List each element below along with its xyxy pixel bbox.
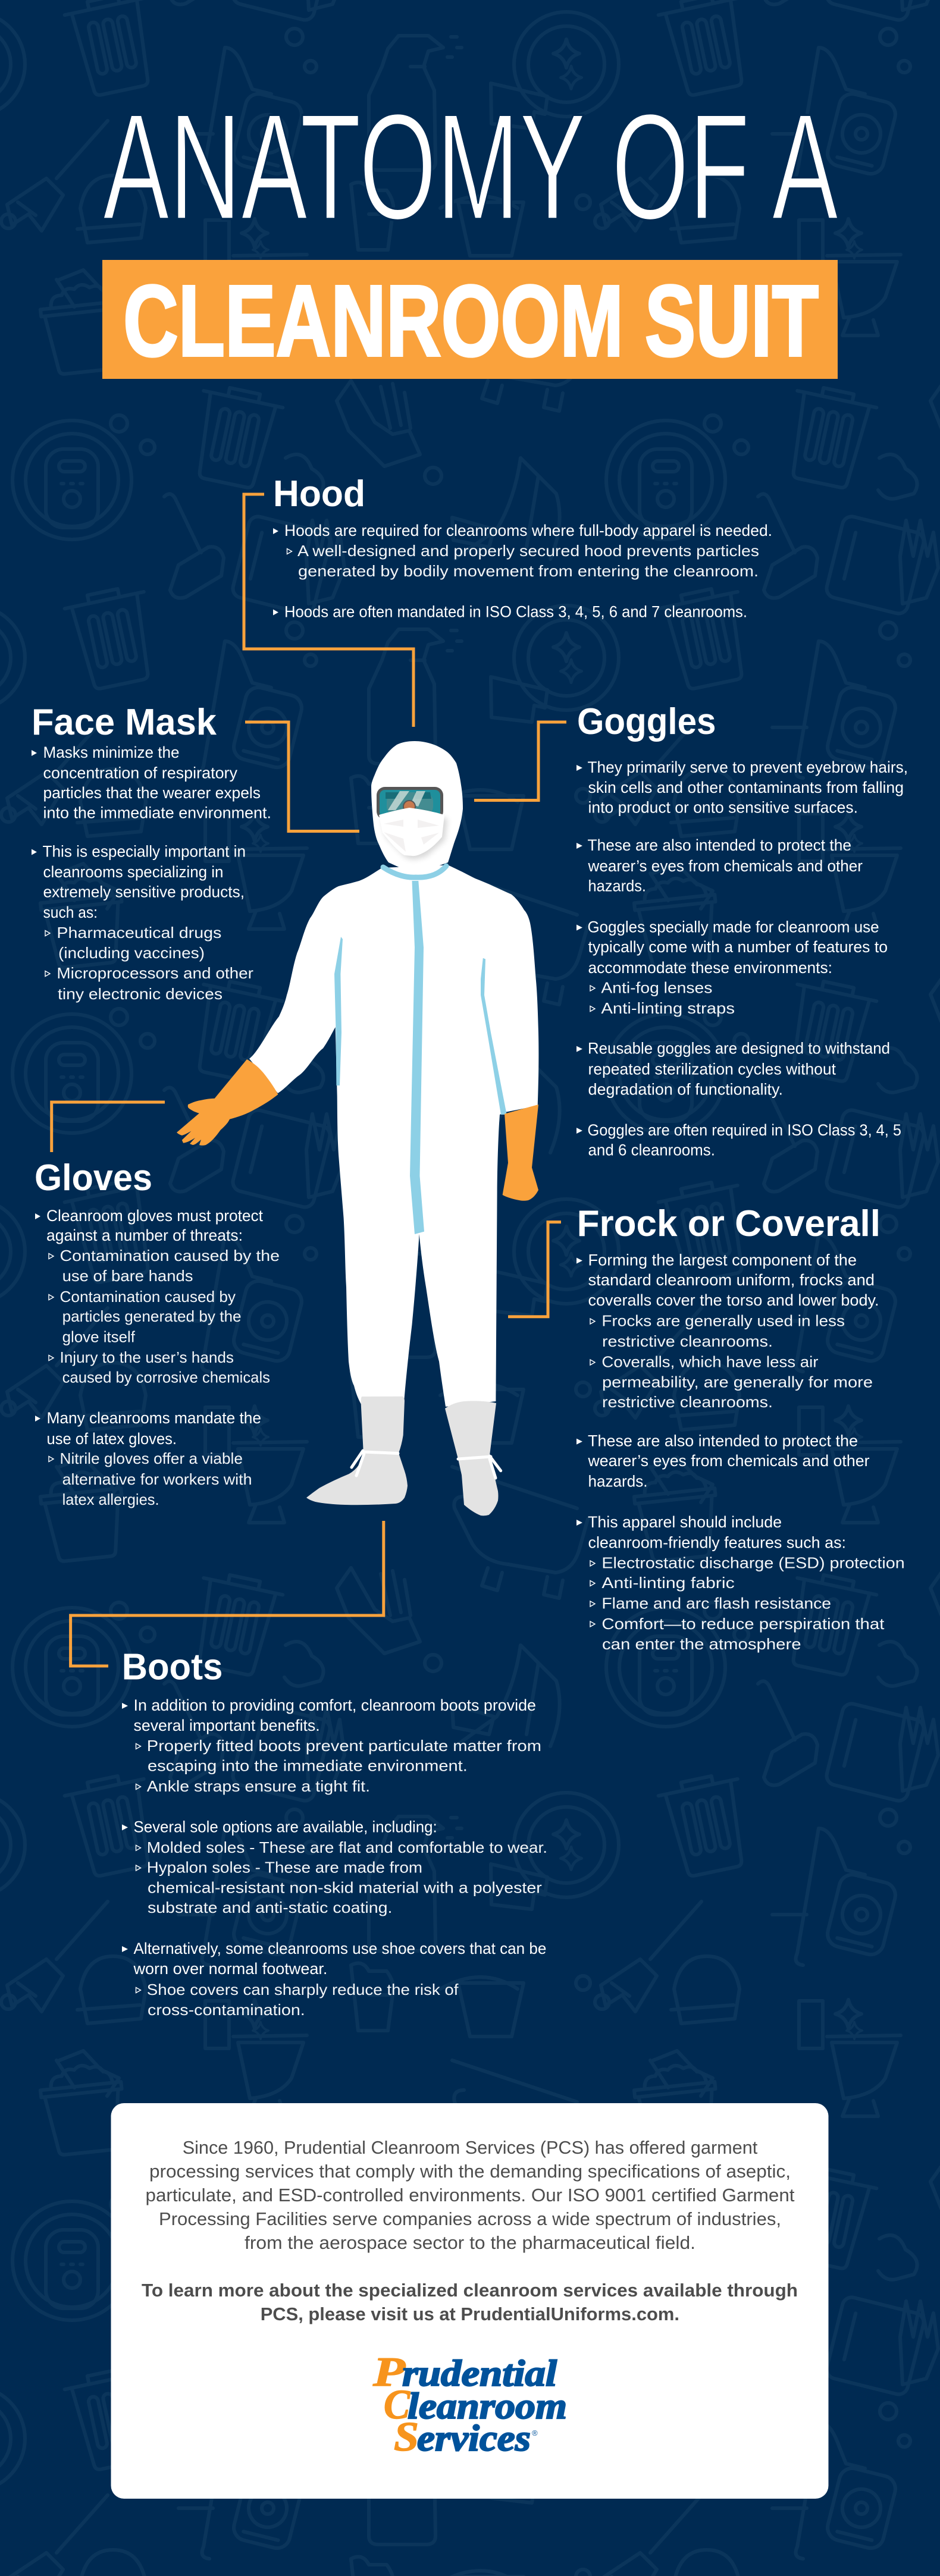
text block: gloves: latex allergies.	[62, 1491, 159, 1508]
text block: face mask: Microprocessors and other	[57, 964, 253, 982]
text block: frock or coverall: wearer’s eyes from chemicals and other	[587, 1452, 870, 1470]
text block: frock or coverall: Flame and arc flash resistance	[601, 1595, 831, 1612]
text block: frock or coverall: coveralls cover the torso and lower body.	[588, 1291, 879, 1309]
text block: boots: Ankle straps ensure a tight fit.	[147, 1777, 370, 1795]
text block: about: Since 1960, Prudential Cleanroom Services (PCS) has offered garment	[183, 2137, 758, 2158]
text block: gloves	[35, 1207, 280, 1508]
text block: goggles: They primarily serve to prevent eyebrow hairs,	[588, 758, 908, 776]
glove: left	[177, 1059, 278, 1146]
logo: Prudential Cleanroom Services	[372, 2349, 567, 2460]
call to action: PCS, please visit us at PrudentialUniforms.com.	[261, 2304, 679, 2324]
panel: goggles	[474, 701, 908, 1159]
logo: Prudential Cleanroom Services: ervices	[417, 2418, 531, 2459]
text block: goggles: typically come with a number of features to	[588, 938, 888, 956]
text block: frock or coverall: restrictive cleanrooms.	[602, 1332, 773, 1350]
text block: goggles: wearer’s eyes from chemicals and other	[588, 857, 863, 875]
text block: boots: Alternatively, some cleanrooms use shoe covers that can be	[133, 1940, 546, 1957]
text block: boots: Molded soles - These are flat and comfortable to wear.	[147, 1838, 547, 1856]
heading: gloves: Gloves	[35, 1157, 152, 1198]
text block: frock or coverall: restrictive cleanrooms.	[602, 1393, 773, 1411]
text block: frock or coverall: This apparel should include	[588, 1513, 782, 1531]
suit stripes	[334, 881, 507, 1234]
text block: hood: Hoods are often mandated in ISO Class 3, 4, 5, 6 and 7 cleanrooms.	[284, 603, 747, 621]
text block: frock or coverall: Forming the largest component of the	[588, 1251, 857, 1269]
text block: frock or coverall: Comfort—to reduce perspiration that	[601, 1615, 885, 1633]
text block: about: particulate, and ESD-controlled environments. Our ISO 9001 certified Garment	[145, 2185, 795, 2205]
text block: frock or coverall: can enter the atmosphere	[602, 1635, 801, 1653]
text block: gloves: alternative for workers with	[62, 1470, 252, 1488]
figure: person in cleanroom suit	[177, 741, 538, 1516]
text block: frock or coverall	[576, 1251, 905, 1653]
text block: gloves: Nitrile gloves offer a viable	[59, 1449, 243, 1467]
face mask	[379, 808, 447, 859]
suit body	[249, 865, 538, 1407]
text block: gloves: glove itself	[62, 1328, 136, 1345]
text block: face mask: concentration of respiratory	[43, 764, 238, 782]
text block: frock or coverall: hazards.	[588, 1473, 647, 1491]
logo: Prudential Cleanroom Services: C	[384, 2382, 411, 2428]
connector: face mask	[245, 722, 359, 832]
text block: gloves: particles generated by the	[62, 1307, 242, 1325]
text block: frock or coverall: These are also intended to protect the	[588, 1432, 858, 1450]
hood	[371, 741, 463, 874]
text block: boots: cross-contamination.	[148, 2001, 305, 2019]
heading: face mask: Face Mask	[32, 702, 217, 743]
text block: goggles: and 6 cleanrooms.	[588, 1141, 715, 1159]
text block: boots: Properly fitted boots prevent particulate matter from	[147, 1737, 541, 1755]
text block: goggles: Goggles specially made for cleanroom use	[588, 918, 879, 936]
text block: face mask: (including vaccines)	[58, 944, 205, 962]
text block: boots: chemical-resistant non-skid material with a polyester	[148, 1878, 542, 1896]
text block: boots: worn over normal footwear.	[133, 1960, 327, 1978]
logo: Prudential Cleanroom Services: P	[372, 2349, 406, 2395]
connector: gloves	[52, 1102, 165, 1152]
text block: hood: generated by bodily movement from entering the cleanroom.	[298, 562, 759, 580]
text block: goggles: hazards.	[588, 877, 646, 895]
text block: goggles: Anti-fog lenses	[601, 979, 712, 997]
text block: boots: substrate and anti-static coating.	[148, 1899, 393, 1916]
text block: gloves: Cleanroom gloves must protect	[46, 1207, 264, 1225]
text block: about	[145, 2137, 795, 2253]
text block: about: from the aerospace sector to the pharmaceutical field.	[245, 2232, 695, 2253]
heading: frock or coverall: Frock or Coverall	[577, 1203, 881, 1244]
connector: frock	[508, 1222, 561, 1317]
text block: boots: In addition to providing comfort, cleanroom boots provide	[133, 1696, 536, 1714]
text block: frock or coverall: permeability, are generally for more	[602, 1373, 873, 1391]
text block: goggles: Goggles are often required in ISO Class 3, 4, 5	[588, 1121, 901, 1139]
text block: boots	[122, 1696, 547, 2019]
goggles	[377, 787, 443, 820]
text block: hood: Hoods are required for cleanrooms where full-body apparel is needed.	[284, 522, 772, 539]
text block: gloves: use of bare hands	[62, 1267, 193, 1285]
text block: hood	[273, 522, 772, 621]
connector: hood	[244, 494, 413, 727]
text block: boots: Hypalon soles - These are made from	[147, 1859, 422, 1877]
text block: frock or coverall: Coveralls, which have less air	[601, 1353, 819, 1370]
panel: hood	[244, 473, 772, 727]
connector: goggles	[474, 722, 566, 801]
text block: goggles: These are also intended to protect the	[588, 836, 851, 854]
text block: frock or coverall: standard cleanroom uniform, frocks and	[588, 1271, 875, 1289]
text block: hood: A well-designed and properly secured hood prevents particles	[297, 542, 759, 560]
text block: frock or coverall: Anti-linting fabric	[601, 1574, 735, 1592]
logo: Prudential Cleanroom Services: ®	[532, 2428, 538, 2437]
title	[102, 82, 838, 379]
text block: face mask: tiny electronic devices	[58, 985, 223, 1003]
panel: frock or coverall	[508, 1203, 905, 1653]
text block: face mask: particles that the wearer expels	[43, 784, 261, 802]
glove: right	[503, 1105, 538, 1201]
text block: frock or coverall: Frocks are generally used in less	[601, 1312, 845, 1330]
panel: boots	[71, 1521, 547, 2019]
connector: boots	[71, 1521, 384, 1666]
text block: goggles: Anti-linting straps	[601, 999, 735, 1017]
text block: gloves: Many cleanrooms mandate the	[46, 1409, 261, 1427]
text block: gloves: against a number of threats:	[46, 1226, 243, 1244]
text block: boots: escaping into the immediate environment.	[148, 1757, 468, 1775]
text block: face mask: extremely sensitive products,	[43, 883, 245, 900]
text block: face mask: such as:	[43, 903, 98, 921]
text block: gloves: Injury to the user’s hands	[59, 1348, 234, 1366]
text block: boots: several important benefits.	[133, 1717, 320, 1734]
text block: goggles	[576, 758, 908, 1159]
text block: face mask	[32, 743, 271, 1003]
text block: face mask: Masks minimize the	[43, 743, 180, 761]
text block: frock or coverall: Electrostatic discharge (ESD) protection	[601, 1554, 905, 1572]
text block: frock or coverall: cleanroom-friendly features such as:	[588, 1533, 846, 1551]
text block: face mask: Pharmaceutical drugs	[57, 924, 221, 942]
text block: boots: Shoe covers can sharply reduce the risk of	[147, 1981, 459, 1998]
logo: Prudential Cleanroom Services: S	[394, 2414, 419, 2460]
collar	[383, 866, 446, 877]
logo: Prudential Cleanroom Services: leanroom	[408, 2386, 567, 2427]
call to action: To learn more about the specialized cleanroom services available through	[142, 2280, 798, 2301]
text block: gloves: use of latex gloves.	[46, 1430, 177, 1448]
text block: goggles: repeated sterilization cycles without	[588, 1060, 836, 1078]
call to action	[142, 2280, 798, 2324]
text block: goggles: skin cells and other contaminants from falling	[588, 779, 904, 796]
boot: left	[306, 1397, 408, 1505]
text block: gloves: Contamination caused by	[59, 1288, 236, 1306]
panel: gloves	[35, 1102, 280, 1508]
text block: gloves: caused by corrosive chemicals	[62, 1368, 270, 1386]
heading: goggles: Goggles	[577, 701, 716, 742]
text block: face mask: into the immediate environment.	[43, 804, 271, 822]
heading: boots: Boots	[122, 1646, 223, 1687]
text block: goggles: degradation of functionality.	[588, 1080, 783, 1098]
text block: goggles: accommodate these environments:	[588, 959, 832, 977]
panel: face mask	[32, 702, 359, 1003]
logo: Prudential Cleanroom Services: rudential	[402, 2354, 557, 2394]
text block: face mask: This is especially important in	[43, 842, 246, 860]
text block: about: processing services that comply with the demanding specifications of aseptic,	[149, 2161, 791, 2182]
boot: right	[445, 1401, 501, 1516]
text block: goggles: Reusable goggles are designed to withstand	[588, 1040, 890, 1058]
text block: goggles: into product or onto sensitive surfaces.	[588, 799, 858, 817]
text block: face mask: cleanrooms specializing in	[43, 863, 224, 881]
heading: hood: Hood	[273, 473, 365, 514]
text block: about: Processing Facilities serve companies across a wide spectrum of industries,	[159, 2208, 781, 2229]
text block: boots: Several sole options are available, including:	[133, 1818, 437, 1835]
panel: about PCS	[111, 2103, 828, 2499]
text block: gloves: Contamination caused by the	[59, 1247, 280, 1265]
